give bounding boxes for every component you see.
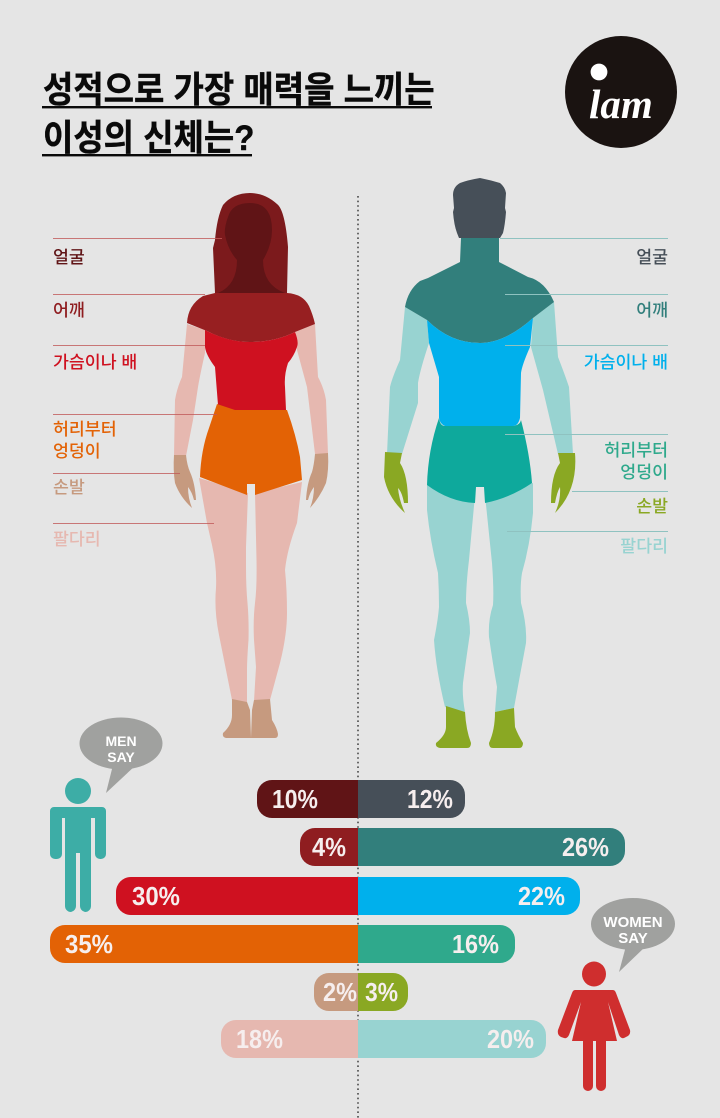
speech bubble: women say [591,898,675,972]
bar chart: men's answers (left) [50,780,358,1058]
icon: man [50,778,106,912]
labels: women's body parts: 엉덩이 [53,441,101,461]
labels: women's body parts: 팔다리 [53,529,101,549]
bar chart: women's answers (right): 16% [452,929,499,959]
bar chart: women's answers (right): 22% [518,881,565,911]
man: chest and belly [427,318,533,426]
speech bubble: men say: MEN [105,733,137,749]
figure: man [384,178,575,748]
bar chart: men's answers (left): 18% [236,1024,283,1054]
labels: men's body parts: 가슴이나 배 [584,352,668,372]
woman: chest and belly [205,330,298,410]
speech bubble: men say: SAY [107,749,135,765]
labels: women's body parts: 얼굴 [53,247,85,267]
man: hands and feet [384,452,575,748]
bar chart: men's answers (left): 10% [272,784,318,814]
title [42,71,435,158]
bar chart: women's answers (right) [358,780,625,1058]
speech bubble: women say: SAY [618,930,648,947]
figure: woman [174,193,328,738]
labels: men's body parts: 얼굴 [636,247,668,267]
bar chart: women's answers (right): 12% [407,784,453,814]
labels: men's body parts: 허리부터 [604,440,668,460]
bar chart: women's answers (right): 26% [562,832,609,862]
labels: women's body parts: 가슴이나 배 [53,352,137,372]
woman: hands and feet [174,453,328,738]
man: head [453,178,506,238]
woman: arms and legs [174,324,328,703]
labels: men's body parts: 어깨 [636,300,668,320]
labels: men's body parts: 엉덩이 [620,462,668,482]
bar chart: men's answers (left): 4% [312,832,346,862]
labels: women's body parts [53,247,137,549]
bar chart: women's answers (right): 3% [365,977,398,1007]
bar chart: men's answers (left): 35% [65,929,113,959]
woman: waist and hips [200,404,302,495]
title: 이성의 신체는? [43,119,254,158]
bar chart: women's answers (right): 20% [487,1024,534,1054]
center dotted divider [357,196,359,1118]
speech bubble: women say: WOMEN [603,914,663,931]
logo: i am: lam [589,81,653,127]
labels: women's body parts: 어깨 [53,300,85,320]
title: 성적으로 가장 매력을 느끼는 [43,71,435,110]
labels: men's body parts [584,247,668,556]
icon: woman [558,962,630,1091]
logo: i am [565,36,677,148]
labels: women's body parts: 허리부터 [53,419,117,439]
man: arms and legs [387,302,573,712]
man: waist and hips [427,418,532,503]
labels: men's body parts: 팔다리 [620,536,668,556]
man: shoulders [405,238,554,343]
woman: shoulders [187,293,315,342]
labels: women's body parts: 손발 [53,477,85,497]
bar chart: men's answers (left): 30% [132,881,180,911]
woman: hair and face [213,193,288,293]
bar chart: men's answers (left): 2% [323,977,357,1007]
leader lines [53,238,668,532]
speech bubble: men say [80,718,162,793]
labels: men's body parts: 손발 [636,496,668,516]
